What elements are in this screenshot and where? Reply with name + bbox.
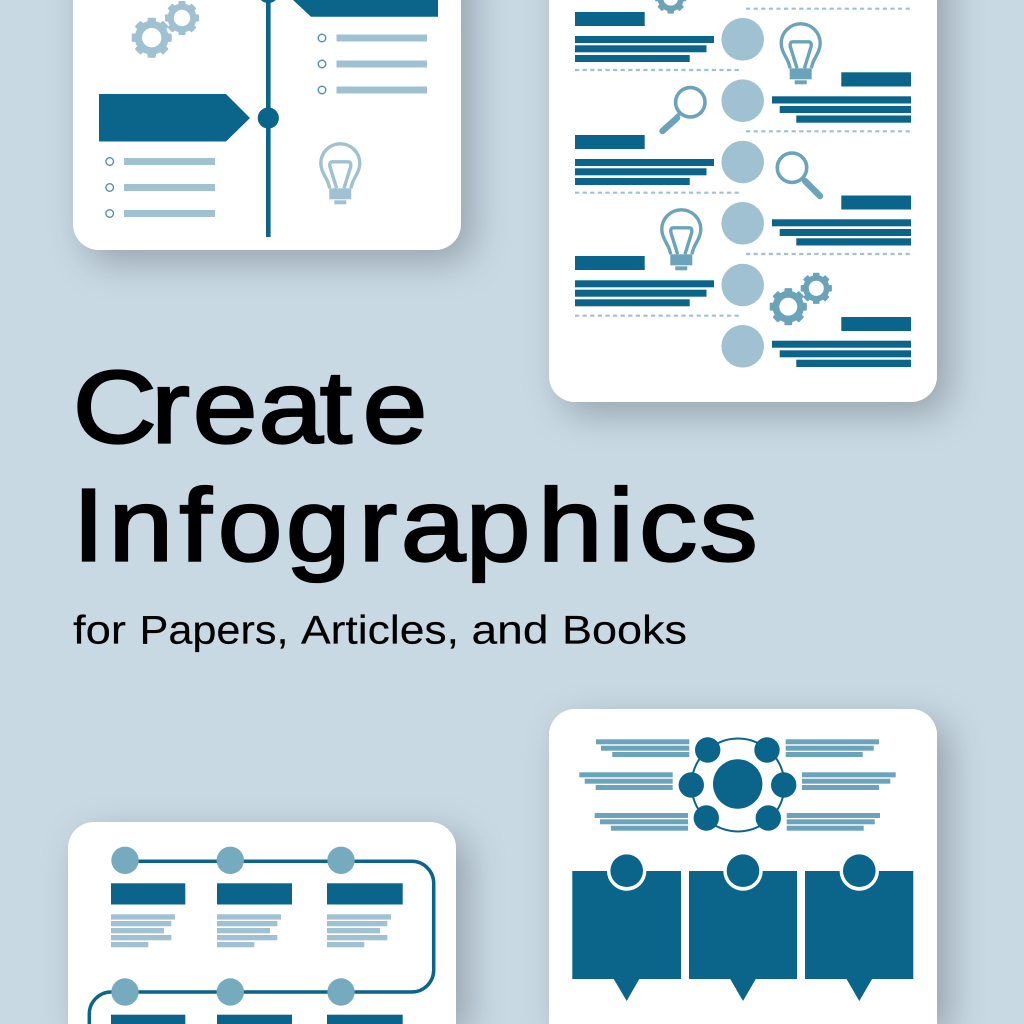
hub diagram xyxy=(679,737,796,832)
subtitle: for xyxy=(73,608,126,652)
callout box one xyxy=(572,851,681,1001)
icon: light bulb one xyxy=(781,24,820,84)
step nodes xyxy=(111,847,355,1006)
callout box three xyxy=(805,851,913,1001)
panel: hub and boxes card xyxy=(549,709,937,1024)
subtitle: and xyxy=(472,608,548,652)
header bars xyxy=(111,883,403,1024)
step circles xyxy=(721,18,764,368)
connector path xyxy=(89,861,434,1024)
subtitle: Books xyxy=(562,608,687,652)
icon: light bulb two xyxy=(662,210,701,270)
title xyxy=(72,351,758,583)
icon: magnifier two xyxy=(777,153,820,196)
icon: light bulb xyxy=(321,144,360,204)
timeline axis xyxy=(258,0,279,237)
text lines xyxy=(111,914,391,947)
left text blocks xyxy=(575,12,714,306)
icon: gear top xyxy=(655,0,686,14)
left bullet list xyxy=(106,158,215,217)
panel: timeline card xyxy=(73,0,461,250)
left arrow label xyxy=(99,94,250,142)
top right arrow label xyxy=(293,0,438,17)
panel: alternating list card xyxy=(549,0,937,402)
hub text lines xyxy=(579,739,896,831)
title: Infographics xyxy=(72,469,758,583)
right text blocks xyxy=(772,72,911,367)
panel: path timeline card xyxy=(68,822,456,1024)
subtitle: Articles, xyxy=(301,608,459,652)
icon: gears xyxy=(132,1,199,58)
subtitle: Papers, xyxy=(140,608,288,652)
callout box two xyxy=(689,851,797,1001)
dashed dividers xyxy=(575,9,911,316)
icon: gears bottom xyxy=(770,273,832,325)
icon: magnifier one xyxy=(662,88,705,131)
top right bullet list xyxy=(318,34,427,94)
title: Create xyxy=(73,351,427,465)
